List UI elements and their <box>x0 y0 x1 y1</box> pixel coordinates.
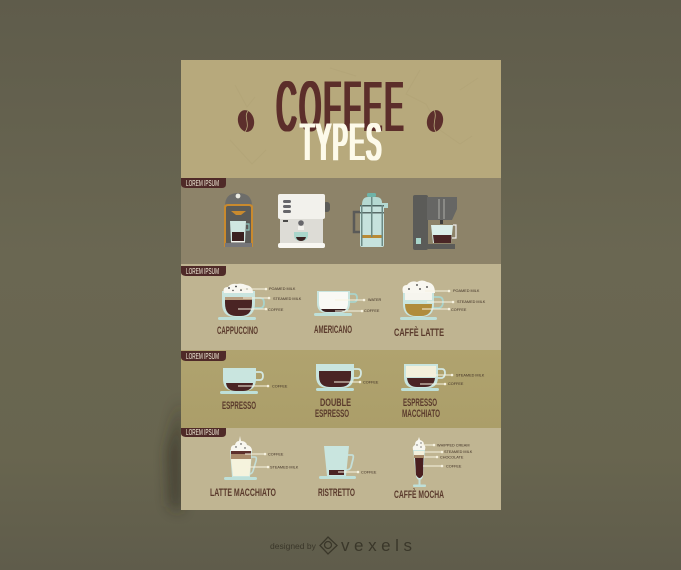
callout labels <box>451 289 486 312</box>
title: types: TYPES <box>300 112 381 172</box>
callout labels: CHOCOLATE <box>440 456 464 460</box>
icon: drip coffee maker <box>413 195 457 250</box>
glass and saucer <box>224 436 257 480</box>
name: ESPRESSO <box>222 400 256 412</box>
callout labels: COFFEE <box>446 464 462 468</box>
tab: section 4: LOREM IPSUM <box>186 428 219 437</box>
icon: french press <box>354 193 388 247</box>
callout labels: STEAMED MILK <box>444 450 473 454</box>
callout lines <box>238 288 270 310</box>
name: DOUBLE <box>320 397 351 409</box>
cup and saucer <box>400 280 443 320</box>
panel: coffee machines <box>181 178 501 264</box>
cup and saucer <box>220 368 263 394</box>
callout labels: STEAMED MILK <box>270 466 299 470</box>
callout labels <box>437 444 473 468</box>
callout labels <box>268 452 299 470</box>
ristretto <box>318 446 377 499</box>
panel: specialty coffees <box>181 428 501 510</box>
name: LATTE MACCHIATO <box>210 487 276 499</box>
name <box>402 397 440 420</box>
name <box>315 397 351 420</box>
panel: milk coffees <box>181 264 501 350</box>
callout line <box>334 381 361 383</box>
callout labels: COFFEE <box>268 452 284 456</box>
callout labels <box>448 374 485 386</box>
espresso macchiato <box>401 364 485 420</box>
callout labels: WATER <box>368 298 382 302</box>
callout labels: POAMED MILK <box>269 287 296 291</box>
header texture <box>230 68 478 164</box>
tab: section 3 <box>181 351 226 361</box>
callout labels: STEAMED MILK <box>456 374 485 378</box>
callout labels: COFFEE <box>451 308 467 312</box>
callout label: COFFEE <box>361 470 377 474</box>
callout lines <box>335 299 365 312</box>
caffe mocha <box>394 437 473 501</box>
callout labels: WHIPPED CREAM <box>437 444 470 448</box>
watermark <box>270 536 412 555</box>
icon: capsule machine <box>224 193 253 247</box>
poster <box>181 60 501 510</box>
tab: section 3: LOREM IPSUM <box>186 352 219 361</box>
cup and saucer <box>218 284 264 320</box>
name: CAPPUCCINO <box>217 325 258 337</box>
cappuccino <box>217 284 302 337</box>
callout label: COFFEE <box>363 380 379 384</box>
name: AMERICANO <box>314 324 352 336</box>
callout lines <box>245 453 269 468</box>
callout labels: COFFEE <box>268 308 284 312</box>
callout lines <box>421 444 443 467</box>
callout labels <box>268 287 302 312</box>
icon: coffee bean left <box>236 109 256 133</box>
americano <box>314 291 382 336</box>
cup and saucer <box>314 291 357 316</box>
callout labels: COFFEE <box>364 309 380 313</box>
designed by: designed by <box>270 541 317 551</box>
callout labels: COFFEE <box>448 382 464 386</box>
double espresso <box>315 364 379 420</box>
callout labels: STEAMED MILK <box>273 297 302 301</box>
espresso <box>220 368 288 412</box>
callout labels: STEAMED MILK <box>457 300 486 304</box>
title: coffee: COFFEE <box>276 68 403 147</box>
name: MACCHIATO <box>402 408 440 420</box>
cup and saucer <box>316 364 361 391</box>
header panel <box>181 60 501 178</box>
cup and saucer <box>401 364 445 391</box>
icon: vexels logo <box>320 537 337 554</box>
callout labels: POAMED MILK <box>453 289 480 293</box>
icon: espresso machine <box>278 194 330 248</box>
tab: section 2 <box>181 266 226 276</box>
panel: espressos <box>181 350 501 428</box>
poster shadow <box>168 400 181 512</box>
callout labels <box>364 298 382 313</box>
callout label: COFFEE <box>272 384 288 388</box>
glass <box>413 437 426 487</box>
caffe latte <box>394 280 486 339</box>
tab: section 1 <box>181 178 226 188</box>
name: CAFFÈ LATTE <box>394 326 444 339</box>
name: RISTRETTO <box>318 487 355 499</box>
tab: section 2: LOREM IPSUM <box>186 267 219 276</box>
callout line <box>338 471 359 473</box>
cup and saucer <box>319 446 356 479</box>
callout line <box>238 385 269 387</box>
callout lines <box>422 290 454 310</box>
tab: section 1: LOREM IPSUM <box>186 179 219 188</box>
tab: section 4 <box>181 428 226 437</box>
icon: coffee bean right <box>425 109 445 133</box>
latte macchiato <box>210 436 299 499</box>
name: CAFFÈ MOCHA <box>394 488 444 501</box>
callout lines <box>420 374 453 385</box>
name: ESPRESSO <box>315 408 349 420</box>
vexels: vexels <box>341 536 412 555</box>
name: ESPRESSO <box>403 397 437 409</box>
